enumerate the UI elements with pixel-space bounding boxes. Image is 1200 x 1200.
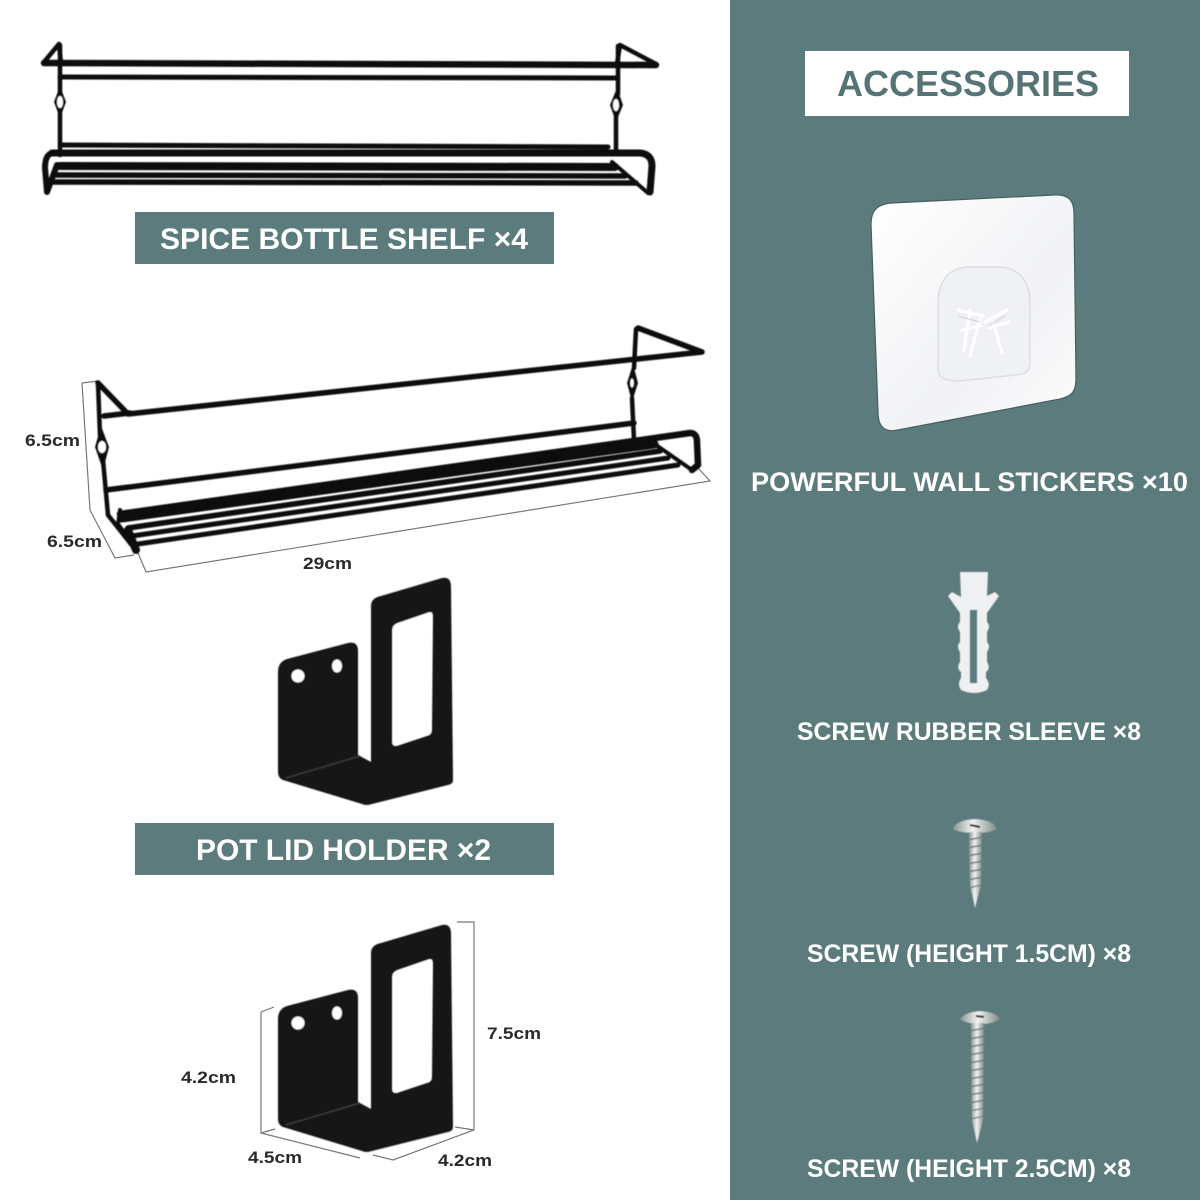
label: wall stickers: POWERFUL WALL STICKERS ×10: [751, 467, 1188, 497]
dimension lines: [261, 922, 474, 1160]
icon: rubber sleeve anchor: [948, 572, 999, 693]
label: holder depth: 4.2cm: [438, 1151, 492, 1170]
label: holder short height: 4.2cm: [181, 1068, 236, 1087]
label: shelf height: 6.5cm: [25, 431, 80, 450]
icon: short screw: [953, 819, 997, 908]
holder shape: [278, 925, 453, 1152]
label: shelf depth: 6.5cm: [47, 532, 102, 551]
illustration: pot lid holder: [278, 578, 453, 805]
banner: pot lid holder: [135, 823, 554, 875]
illustration: pot lid holder with dimensions: [181, 922, 541, 1170]
illustration: spice bottle shelf front view: [44, 44, 656, 193]
illustration: shelf with dimensions: [25, 328, 710, 573]
dimension lines: [82, 381, 710, 572]
wire shelf perspective: [95, 328, 702, 550]
heading: accessories: [805, 51, 1129, 116]
label: short screw: SCREW (HEIGHT 1.5CM) ×8: [807, 940, 1131, 968]
banner: spice bottle shelf: SPICE BOTTLE SHELF ×4: [160, 223, 528, 256]
label: rubber sleeve: SCREW RUBBER SLEEVE ×8: [797, 718, 1141, 746]
icon: long screw: [960, 1011, 1000, 1143]
banner: spice bottle shelf: [135, 212, 554, 264]
icon: wall sticker: [871, 195, 1076, 431]
banner: pot lid holder: POT LID HOLDER ×2: [196, 834, 491, 867]
label: long screw: SCREW (HEIGHT 2.5CM) ×8: [807, 1155, 1131, 1183]
label: shelf length: 29cm: [303, 554, 352, 573]
heading: accessories: ACCESSORIES: [837, 63, 1099, 104]
label: holder width: 4.5cm: [248, 1148, 302, 1167]
panel: accessories background: [730, 0, 1200, 1200]
label: holder height: 7.5cm: [487, 1024, 541, 1043]
